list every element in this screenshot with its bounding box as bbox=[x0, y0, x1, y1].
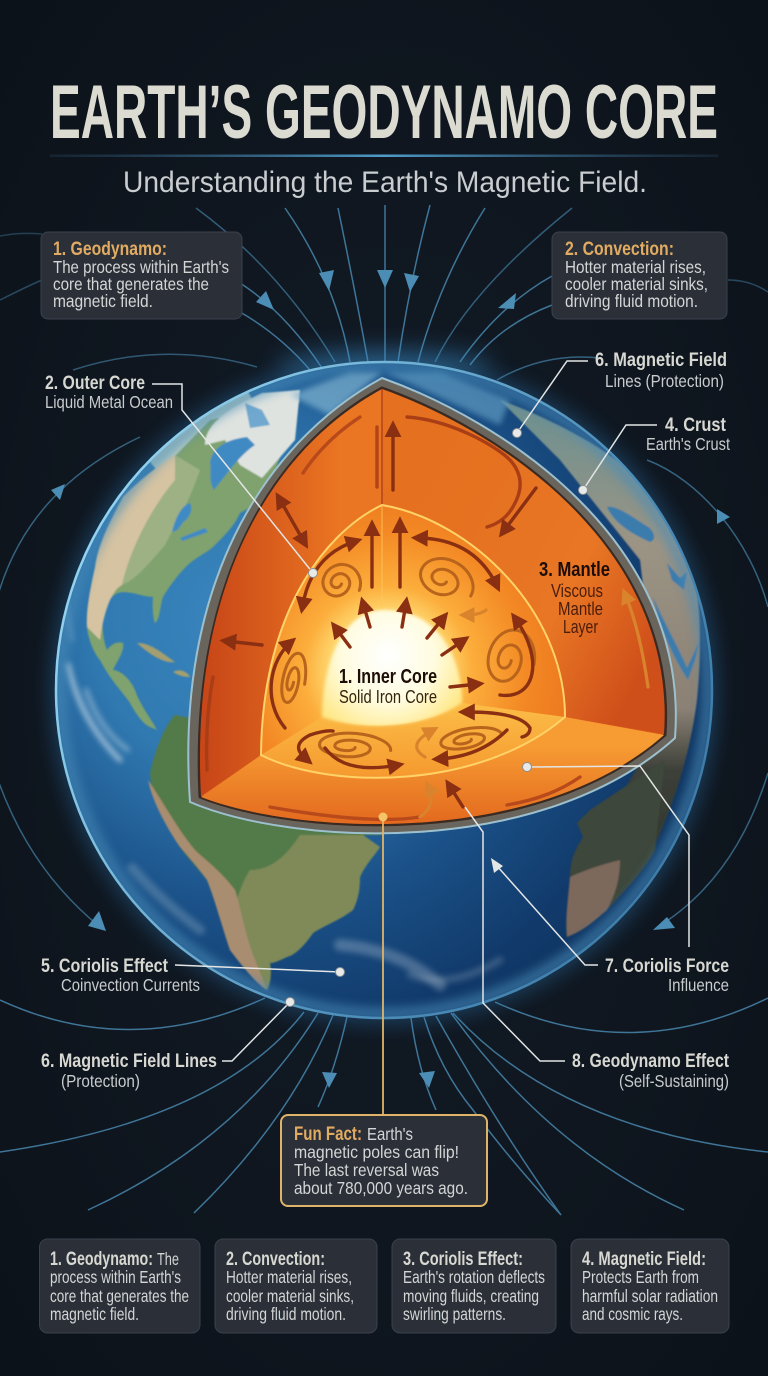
label: inner core bbox=[339, 666, 437, 707]
card: geodynamo: The bbox=[157, 1249, 179, 1269]
card: magnetic field: Protects Earth from bbox=[582, 1267, 699, 1287]
card: magnetic field: and cosmic rays. bbox=[582, 1304, 683, 1324]
inner core bbox=[322, 610, 462, 725]
card: geodynamo: core that generates the bbox=[50, 1286, 189, 1306]
card: coriolis effect bbox=[392, 1239, 556, 1333]
label: magnetic field top: Lines (Protection) bbox=[605, 371, 724, 391]
earth globe bbox=[50, 348, 718, 1024]
outer core floor bbox=[261, 703, 565, 778]
panel: geodynamo callout bbox=[41, 232, 242, 319]
label: coriolis effect: Coinvection Currents bbox=[61, 975, 200, 995]
card: magnetic field: 4. Magnetic Field: bbox=[582, 1248, 706, 1270]
label: mantle bbox=[539, 559, 610, 637]
label: mantle: Viscous bbox=[551, 581, 603, 601]
panel: convection callout: Hotter material rises, bbox=[565, 257, 706, 277]
panel: convection callout bbox=[552, 232, 727, 319]
icon: field arrowheads bbox=[51, 270, 730, 1088]
label: magnetic field top: 6. Magnetic Field bbox=[595, 349, 727, 371]
north america bbox=[150, 392, 252, 469]
card: coriolis effect: Earth's rotation deflects bbox=[403, 1267, 545, 1287]
flow arrows bbox=[207, 417, 580, 819]
label: outer core: 2. Outer Core bbox=[45, 372, 145, 394]
crust rim bbox=[188, 378, 676, 833]
mantle base bbox=[199, 388, 666, 825]
caribbean islands bbox=[137, 643, 190, 677]
outer core sphere bbox=[261, 505, 565, 778]
card: convection: Hotter material rises, bbox=[226, 1267, 352, 1287]
panel: fun fact: Fun Fact: bbox=[294, 1123, 362, 1145]
panel: fun fact: Earth's bbox=[367, 1124, 413, 1144]
clouds bbox=[58, 560, 500, 985]
label: coriolis force leader bbox=[522, 762, 689, 947]
label: crust: Earth's Crust bbox=[646, 434, 730, 454]
label: outer core bbox=[45, 372, 318, 578]
panel: fun fact: about 780,000 years ago. bbox=[294, 1178, 468, 1198]
panel: geodynamo callout: 1. Geodynamo: bbox=[53, 238, 167, 260]
panel: geodynamo callout: The process within Earth's bbox=[53, 257, 229, 277]
panel: fun fact bbox=[281, 1115, 487, 1206]
label: magnetic field lines: 6. Magnetic Field Lines bbox=[41, 1050, 217, 1072]
eurasia and africa bbox=[500, 400, 700, 845]
label: magnetic field lines bbox=[41, 998, 294, 1091]
panel: convection callout: driving fluid motion. bbox=[565, 291, 698, 311]
label: coriolis effect bbox=[41, 955, 344, 995]
card: coriolis effect: 3. Coriolis Effect: bbox=[403, 1248, 523, 1270]
card: convection bbox=[215, 1239, 377, 1333]
label: geodynamo effect: 8. Geodynamo Effect bbox=[572, 1050, 729, 1072]
title divider bbox=[50, 154, 718, 157]
magnetic field lines bbox=[0, 205, 768, 1215]
label: coriolis force: Influence bbox=[668, 975, 729, 995]
label: coriolis force bbox=[491, 858, 729, 995]
card: geodynamo: process within Earth's bbox=[50, 1267, 181, 1287]
card: geodynamo: 1. Geodynamo: bbox=[50, 1248, 153, 1270]
core cutaway wedge bbox=[188, 378, 676, 833]
label: mantle: Mantle bbox=[558, 599, 603, 619]
panel: geodynamo callout: magnetic field. bbox=[53, 291, 153, 311]
card: magnetic field bbox=[571, 1239, 729, 1333]
card: convection: 2. Convection: bbox=[226, 1248, 325, 1270]
card: coriolis effect: moving fluids, creating bbox=[403, 1286, 539, 1306]
label: inner core: Solid Iron Core bbox=[339, 687, 437, 707]
pale polar ocean near the top bbox=[290, 372, 382, 415]
card: geodynamo bbox=[40, 1239, 200, 1333]
label: mantle: 3. Mantle bbox=[539, 559, 610, 581]
label: magnetic field top bbox=[512, 349, 727, 438]
card: coriolis effect: swirling patterns. bbox=[403, 1304, 506, 1324]
convection spirals bbox=[279, 549, 539, 761]
south america bbox=[150, 715, 385, 990]
panel: geodynamo callout: core that generates the bbox=[53, 274, 209, 294]
label: crust: 4. Crust bbox=[665, 414, 726, 436]
panel: fun fact: magnetic poles can flip! bbox=[294, 1142, 459, 1162]
label: inner core: 1. Inner Core bbox=[339, 666, 437, 688]
card: geodynamo: magnetic field. bbox=[50, 1304, 139, 1324]
label: coriolis force: 7. Coriolis Force bbox=[605, 955, 729, 977]
card: convection: driving fluid motion. bbox=[226, 1304, 346, 1324]
label: mantle: Layer bbox=[563, 617, 598, 637]
panel: convection callout: cooler material sinks, bbox=[565, 274, 708, 294]
fun fact connector bbox=[378, 812, 388, 1115]
subtitle: Understanding the Earth's Magnetic Field. bbox=[123, 166, 647, 199]
mantle left face bbox=[200, 389, 382, 796]
label: outer core: Liquid Metal Ocean bbox=[45, 392, 173, 412]
mantle right face bbox=[382, 389, 665, 734]
limb band bbox=[60, 366, 708, 1014]
card: convection: cooler material sinks, bbox=[226, 1286, 354, 1306]
label: geodynamo effect: (Self-Sustaining) bbox=[619, 1071, 729, 1091]
panel: convection callout: 2. Convection: bbox=[565, 238, 674, 260]
land masses bbox=[87, 385, 700, 990]
label: coriolis effect: 5. Coriolis Effect bbox=[41, 955, 168, 977]
label: geodynamo effect bbox=[465, 807, 729, 1091]
label: magnetic field lines: (Protection) bbox=[61, 1071, 140, 1091]
label: crust bbox=[578, 414, 730, 494]
card: magnetic field: harmful solar radiation bbox=[582, 1286, 718, 1306]
mantle floor bbox=[201, 717, 664, 824]
panel: fun fact: The last reversal was bbox=[294, 1160, 439, 1180]
